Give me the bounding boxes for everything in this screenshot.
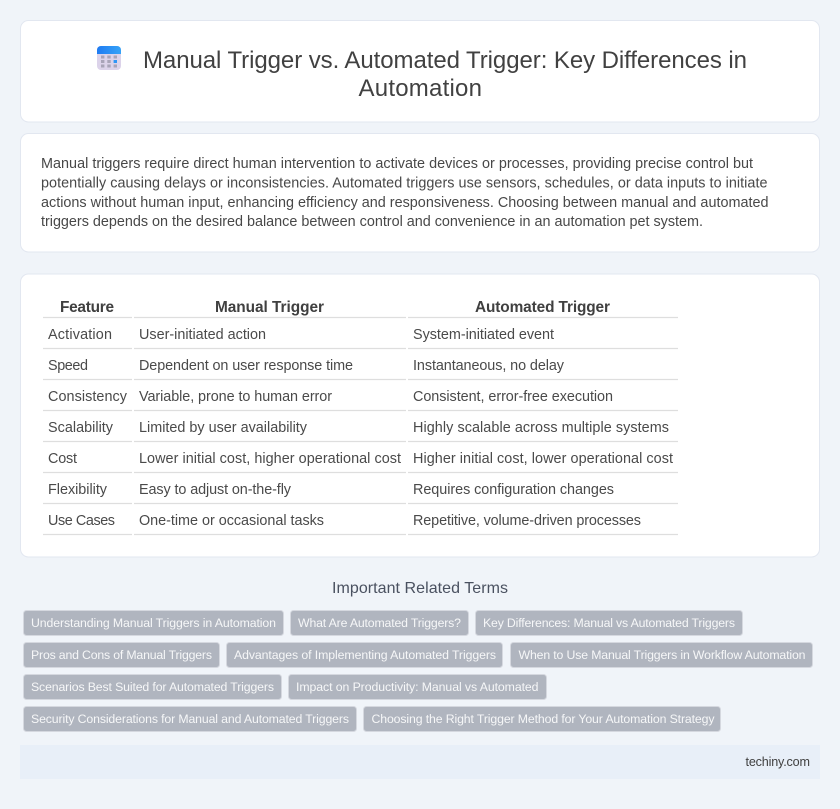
panel: title header <box>20 20 820 122</box>
row: activation: User-initiated action <box>139 327 266 343</box>
footer <box>20 745 820 779</box>
icon: calendar <box>97 46 121 70</box>
table header: Feature <box>60 299 114 316</box>
table header <box>60 299 610 316</box>
intro paragraph <box>41 156 768 230</box>
tag: What Are Automated Triggers? <box>298 616 461 630</box>
tag <box>24 706 356 732</box>
tag <box>24 610 284 636</box>
tag <box>226 642 502 668</box>
title: Automation <box>358 75 482 102</box>
row: cost: Lower initial cost, higher operational cost <box>139 451 401 467</box>
tag: Scenarios Best Suited for Automated Triggers <box>31 680 274 694</box>
footer: techiny.com <box>746 755 810 769</box>
row: cost: Cost <box>48 451 77 467</box>
tag: Impact on Productivity: Manual vs Automated <box>296 680 539 694</box>
tag: Key Differences: Manual vs Automated Triggers <box>483 616 735 630</box>
intro paragraph: potentially causing delays or inconsistencies. Automated triggers use sensors, schedules, or data inputs to initiate <box>41 176 768 192</box>
tag: Choosing the Right Trigger Method for Your Automation Strategy <box>372 712 715 726</box>
row: speed <box>48 358 565 374</box>
tag <box>290 610 468 636</box>
row: scalability: Limited by user availability <box>139 420 308 436</box>
tag: Understanding Manual Triggers in Automation <box>31 616 276 630</box>
title: Manual Trigger vs. Automated Trigger: Key Differences in <box>143 47 747 74</box>
row: speed: Speed <box>48 358 88 374</box>
row: use cases: One-time or occasional tasks <box>139 513 324 529</box>
row: scalability: Scalability <box>48 420 114 436</box>
row: consistency: Consistent, error-free execution <box>413 389 613 405</box>
row: activation: System-initiated event <box>413 327 554 343</box>
intro paragraph: triggers depends on the desired balance between control and convenience in an automation pet system. <box>41 214 703 230</box>
tag <box>510 642 812 668</box>
panel: introduction <box>20 134 820 252</box>
intro paragraph: actions without human input, enhancing efficiency and responsiveness. Choosing between manual and automated <box>41 195 768 211</box>
tag: Advantages of Implementing Automated Triggers <box>234 648 496 662</box>
row: speed: Dependent on user response time <box>139 358 353 374</box>
table header: Automated Trigger <box>475 299 610 316</box>
row: consistency: Variable, prone to human error <box>139 389 332 405</box>
tag <box>476 610 742 636</box>
tag <box>288 674 546 700</box>
tag <box>24 674 282 700</box>
row: use cases: Use Cases <box>48 513 115 529</box>
tag: Security Considerations for Manual and Automated Triggers <box>31 712 349 726</box>
row: consistency: Consistency <box>48 389 128 405</box>
tag <box>364 706 720 732</box>
row: scalability: Highly scalable across multiple systems <box>413 420 669 436</box>
panel: comparison table <box>20 274 820 557</box>
tag: Pros and Cons of Manual Triggers <box>31 648 212 662</box>
row: speed: Instantaneous, no delay <box>413 358 565 374</box>
intro paragraph: Manual triggers require direct human intervention to activate devices or processes, providing precise control but <box>41 156 753 172</box>
tag group: related terms <box>24 610 812 732</box>
row: flexibility: Easy to adjust on-the-fly <box>139 482 292 498</box>
row: scalability <box>48 420 669 436</box>
tag: When to Use Manual Triggers in Workflow Automation <box>518 648 806 662</box>
tag <box>24 642 220 668</box>
row: flexibility: Requires configuration changes <box>413 482 614 498</box>
title <box>143 47 747 102</box>
row: use cases <box>48 513 641 529</box>
row: consistency <box>48 389 613 405</box>
row: flexibility <box>48 482 614 498</box>
row: activation <box>48 327 554 343</box>
row: activation: Activation <box>48 327 112 343</box>
row: cost: Higher initial cost, lower operational cost <box>413 451 673 467</box>
heading: important related terms: Important Related Terms <box>332 580 508 597</box>
table header: Manual Trigger <box>215 299 324 316</box>
row: flexibility: Flexibility <box>48 482 108 498</box>
row: use cases: Repetitive, volume-driven processes <box>413 513 641 529</box>
row: cost <box>48 451 673 467</box>
